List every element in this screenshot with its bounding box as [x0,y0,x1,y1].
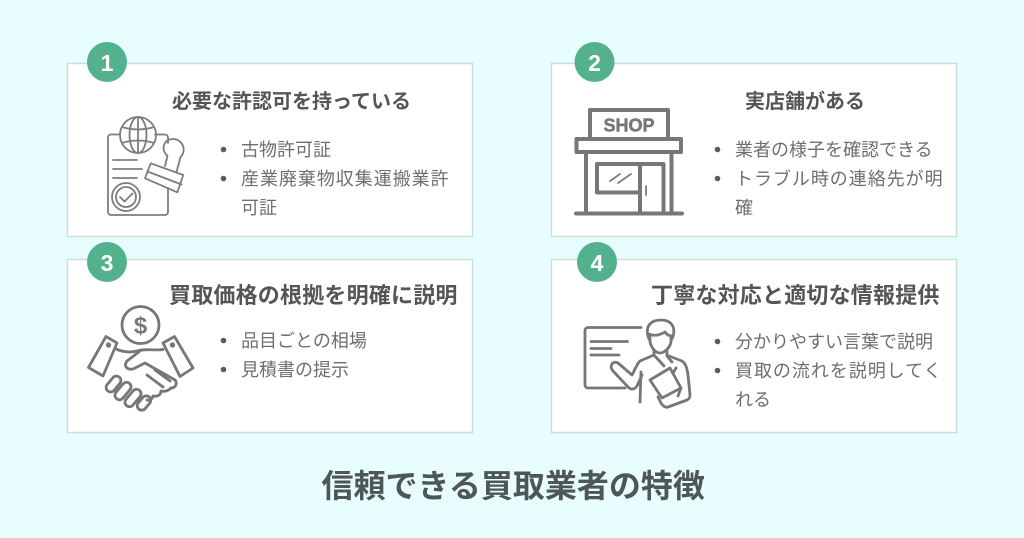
list: card 4: 買取の流れを説明してく [735,361,942,381]
badge 1 [87,42,127,82]
badge 2: 2 [588,50,601,76]
heading: card 1: 必要な許認可を持っている [172,90,411,113]
list: card 1: 古物許可証 [241,140,331,160]
icon: presenter at a board [585,320,690,407]
badge 3 [87,242,127,282]
list: card 1: 産業廃棄物収集運搬業許 [241,169,450,189]
badge 2 [574,42,614,82]
list: card 2: 業者の様子を確認できる [735,140,933,160]
icon: handshake with dollar coin: $ [134,312,148,340]
badge 4 [577,242,617,282]
title: 信頼できる買取業者の特徴 [322,468,705,504]
icon: shop front: SHOP [603,116,655,136]
icon: permit document with globe and stamp [108,117,184,215]
heading: card 4: 丁寧な対応と適切な情報提供 [651,283,940,308]
list: card 2: トラブル時の連絡先が明 [735,168,944,189]
icon: handshake with dollar coin [88,306,193,412]
list: card 1: 可証 [241,198,277,218]
list: card 2 [715,140,944,218]
list: card 4: 分かりやすい言葉で説明 [735,332,933,352]
list: card 4: れる [735,390,771,410]
panel: card 2 physical shop [552,42,956,236]
list: card 4 [715,332,942,410]
list: card 2: 確 [735,198,753,218]
panel: card 3 price explanation [68,242,472,432]
list: card 3: 品目ごとの相場 [241,331,367,351]
badge 1: 1 [101,50,114,76]
list: card 3: 見積書の提示 [241,360,349,380]
list: card 1 [221,140,450,218]
badge 3: 3 [101,250,113,276]
badge 4: 4 [591,250,604,276]
icon: shop front [576,110,682,214]
panel: card 1 required licences [68,42,472,236]
panel: card 4 courteous service [552,242,956,432]
heading: card 2: 実店舗がある [745,89,865,113]
heading: card 3: 買取価格の根拠を明確に説明 [169,283,458,308]
list: card 3 [221,331,367,380]
